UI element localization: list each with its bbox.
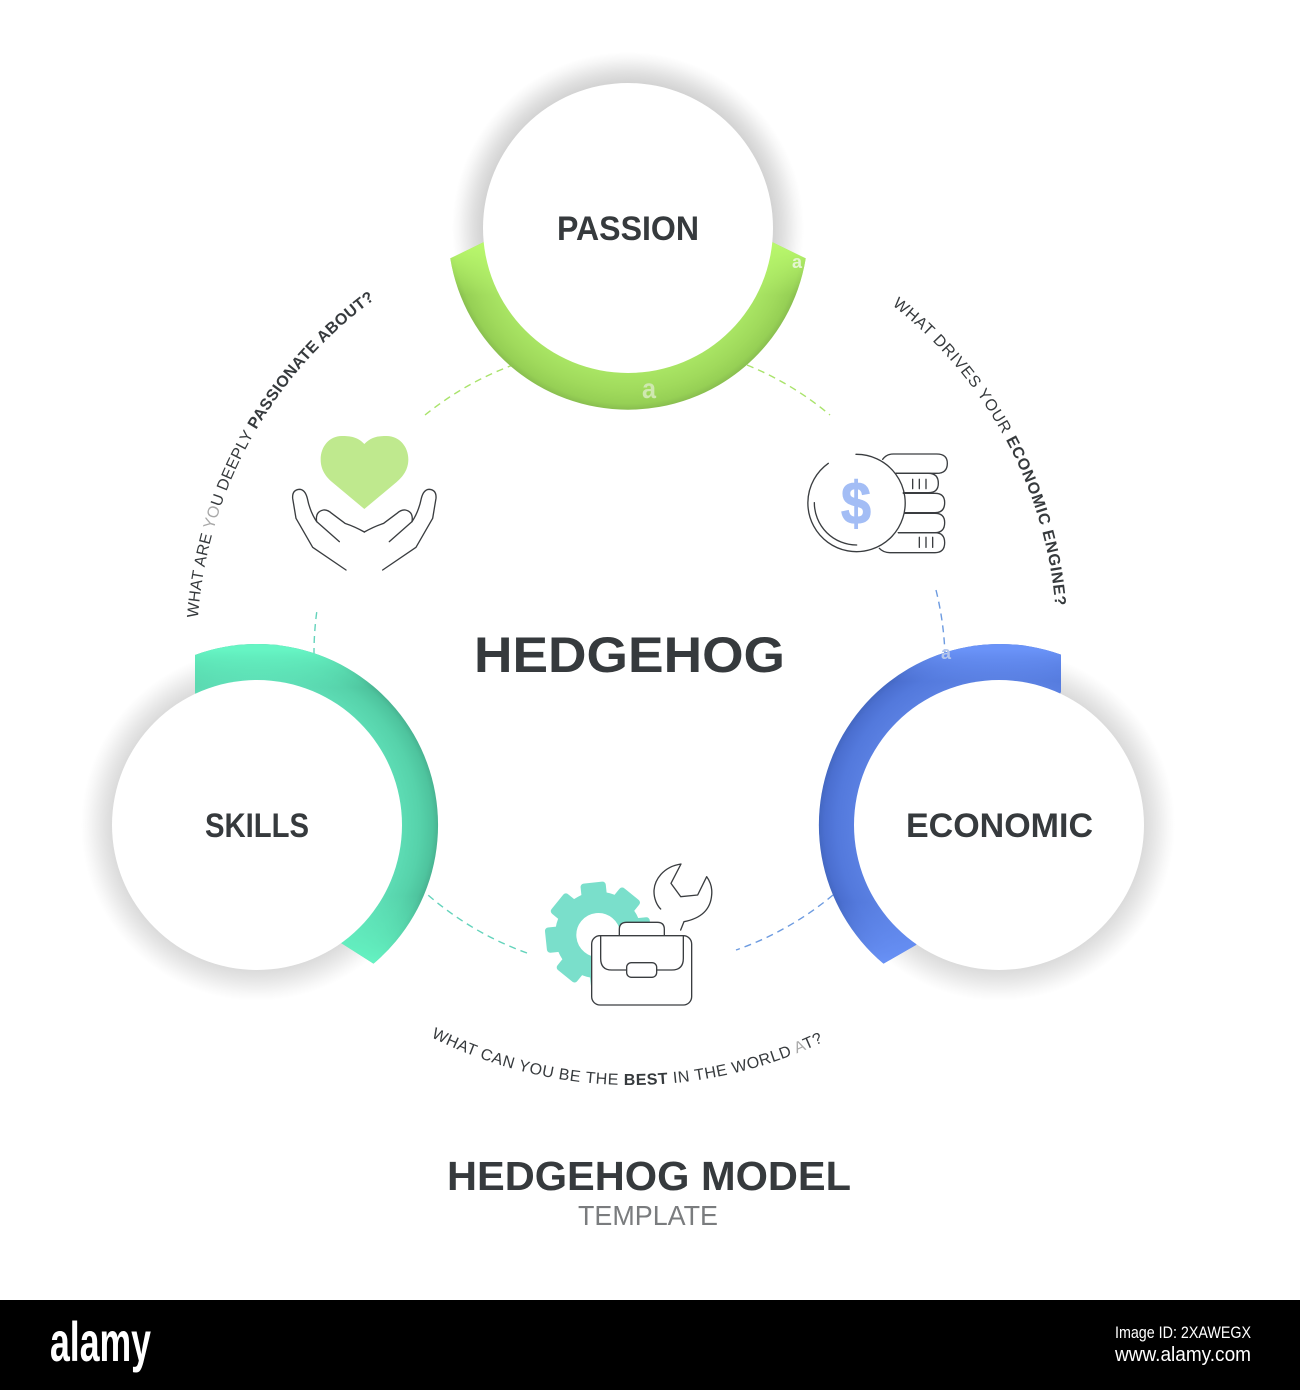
watermark fragments: a [642,373,656,404]
center heading: HEDGEHOG [474,627,785,683]
icon: heart in hands [293,436,436,570]
teal arc [195,644,438,964]
footer logo: alamy [50,1310,151,1373]
skills disc [112,680,402,970]
briefcase [592,922,692,1005]
curved text: skills question: WHAT CAN YOU BE THE BEST IN THE WORLD AT? [434,1027,820,1085]
panel: economic node [819,644,1175,1001]
gear [540,877,656,993]
skills label: SKILLS [205,807,309,845]
watermark fragments: a [941,643,952,663]
curved text: passion question: WHAT ARE YOU DEEPLY PASSIONATE ABOUT? [186,292,372,617]
watermark fragments [642,252,952,663]
icon: gear, wrench and briefcase [540,864,712,1005]
panel: passion node [450,52,806,410]
blue arc [819,644,1061,964]
dashed connector ring [314,365,945,953]
subtitle: TEMPLATE [578,1200,718,1231]
economic disc [854,680,1144,970]
website: www.alamy.com [1114,1344,1251,1366]
watermark fragments: a [792,252,803,272]
dollar sign: $ [841,470,871,537]
icon: coins [808,454,947,553]
panel: skills node [81,644,438,1001]
curved text: economic question: WHAT DRIVES YOUR ECONOMIC ENGINE? [894,296,1066,604]
green arc [450,242,806,410]
passion label: PASSION [557,210,699,248]
image id: Image ID: 2XAWEGX [1115,1323,1251,1342]
title: HEDGEHOG MODEL [447,1153,851,1199]
footer bar [0,1300,1300,1390]
passion disc [483,83,773,373]
wrench [654,864,712,930]
economic label: ECONOMIC [906,807,1093,845]
